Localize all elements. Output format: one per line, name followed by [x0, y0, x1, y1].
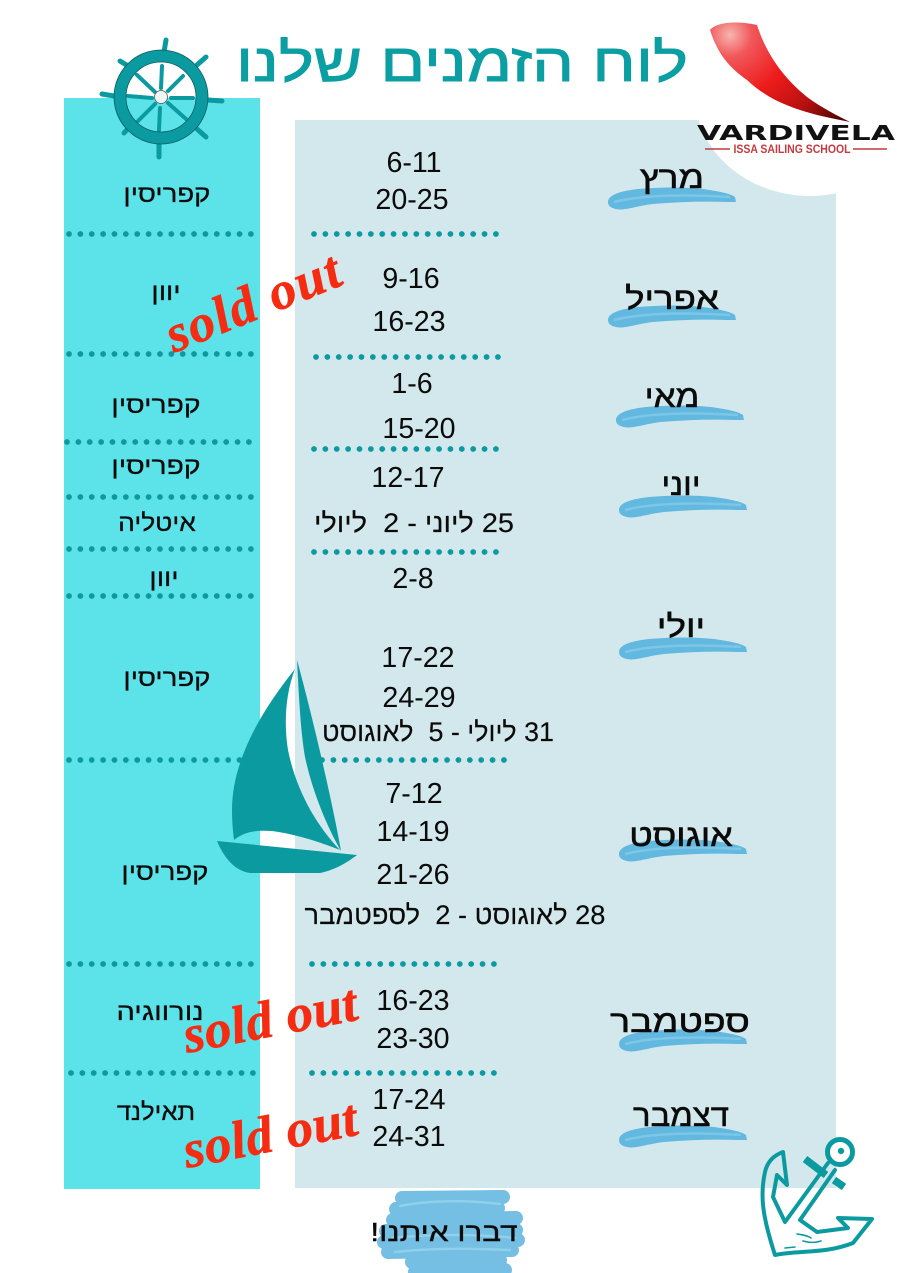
logo background circle — [695, 0, 900, 196]
logo: Vardivela Issa Sailing School: VARDIVELA — [697, 121, 896, 145]
date ranges: 12-17 — [371, 462, 445, 494]
destination labels: קפריסין — [111, 391, 201, 418]
destination labels: איטליה — [118, 510, 196, 537]
month labels: אפריל — [625, 282, 719, 316]
sold out stamp: Greece April: sold out — [156, 241, 351, 365]
date ranges: 24-29 — [382, 682, 456, 714]
dotted separators: destinations — [67, 234, 254, 1073]
sold out stamp: Thailand December: sold out — [177, 1089, 364, 1180]
month labels: דצמבר — [633, 1098, 729, 1133]
sold out stamp: Norway September: sold out — [177, 974, 364, 1065]
date ranges: 1-6 — [391, 368, 433, 400]
date ranges: 24-31 — [372, 1121, 446, 1153]
destination labels: נורווגיה — [116, 998, 204, 1025]
date ranges: 17-22 — [381, 642, 455, 674]
destination labels: קפריסין — [124, 666, 210, 692]
date ranges: 20-25 — [375, 184, 449, 216]
month labels: ספטמבר — [610, 1005, 750, 1039]
month labels: יוני — [661, 467, 701, 502]
date ranges: 15-20 — [382, 413, 456, 445]
date ranges: 2-8 — [392, 563, 434, 595]
brush underlines for months — [608, 188, 747, 1147]
date ranges: 25 ליוני - 2 ליולי — [314, 508, 514, 538]
destination labels — [111, 182, 210, 1126]
month labels: מאי — [645, 379, 699, 414]
dotted separators: dates — [312, 234, 505, 1073]
date ranges — [304, 147, 606, 1153]
date ranges: 6-11 — [386, 147, 442, 179]
logo: Vardivela Issa Sailing School — [697, 23, 896, 156]
icon: anchor — [762, 1140, 872, 1255]
month labels: יולי — [657, 610, 705, 644]
icon: ship wheel — [102, 40, 222, 157]
date ranges: 23-30 — [376, 1023, 450, 1055]
date ranges: 16-23 — [372, 306, 446, 338]
date ranges: 16-23 — [376, 985, 450, 1017]
destination labels: קפריסין — [122, 860, 208, 886]
date ranges: 28 לאוגוסט - 2 לספטמבר — [304, 900, 606, 930]
date ranges: 31 ליולי - 5 לאוגוסט — [322, 717, 554, 747]
month labels: אוגוסט — [629, 819, 733, 853]
icon: sailboat — [217, 660, 357, 873]
month labels: מרץ — [640, 161, 704, 195]
date ranges: 14-19 — [376, 816, 450, 848]
footer brush blob — [384, 1197, 518, 1272]
destination labels: קפריסין — [111, 452, 201, 479]
destination labels: יוון — [149, 564, 179, 592]
date ranges: 21-26 — [376, 859, 450, 891]
destination labels: קפריסין — [124, 182, 210, 208]
destination labels: תאילנד — [117, 1100, 195, 1126]
title: לוח הזמנים שלנו — [236, 33, 688, 93]
month labels — [610, 161, 750, 1133]
panel: dates and months column — [295, 120, 836, 1188]
footer call to action: דברו איתנו! — [370, 1218, 518, 1247]
date ranges: 17-24 — [372, 1084, 446, 1116]
panel: destinations column — [64, 98, 260, 1189]
date ranges: 9-16 — [382, 263, 440, 295]
date ranges: 7-12 — [385, 778, 443, 810]
logo: Vardivela Issa Sailing School: ISSA SAILING SCHOOL — [734, 142, 850, 156]
destination labels: יוון — [151, 278, 181, 306]
